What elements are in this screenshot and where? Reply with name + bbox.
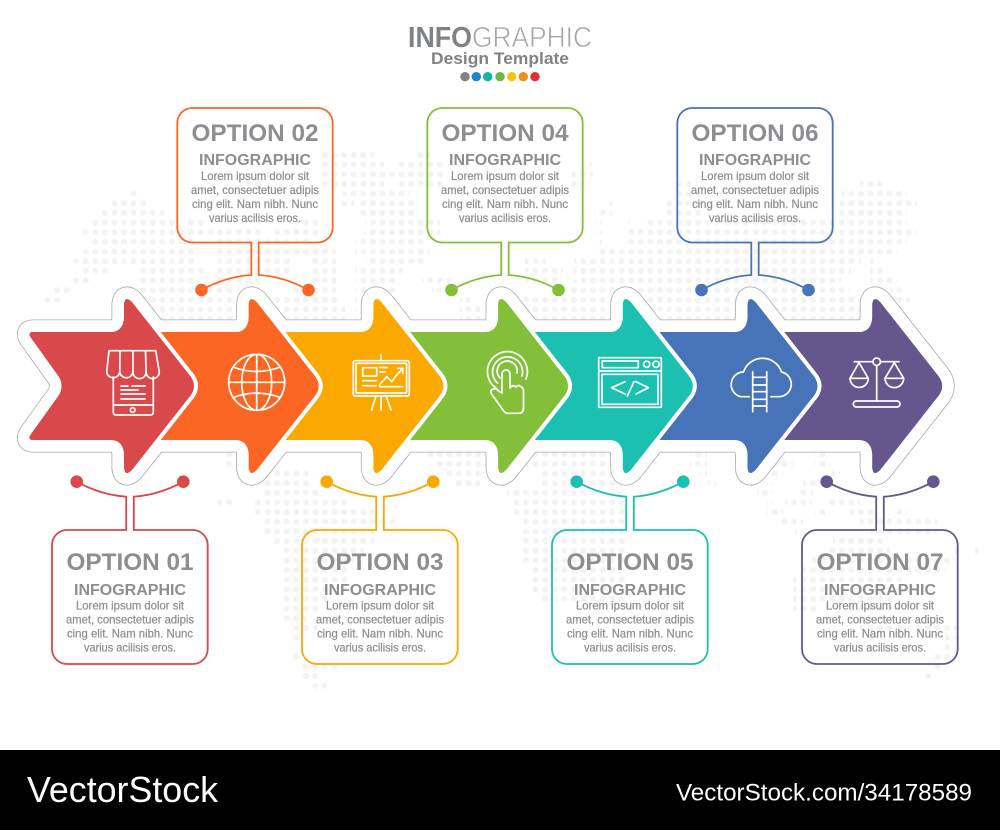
icon: cloud with ladder	[731, 358, 791, 412]
text: option 01: Lorem ipsum dolor sit	[76, 598, 185, 612]
connector dots: option 05	[570, 475, 690, 488]
icon: storefront tablet	[107, 351, 159, 415]
text: option 01: OPTION 01	[66, 549, 194, 576]
text: option 06: amet, consectetuer adipis	[691, 183, 819, 197]
panel: option 06	[677, 108, 833, 296]
arrow 5: teal	[524, 299, 693, 473]
footer bar	[0, 750, 1000, 830]
arrow 6: blue	[648, 299, 818, 473]
text: option 01: cing elit. Nam nibh. Nunc	[67, 626, 193, 640]
panel: option 04	[427, 108, 583, 296]
title: INFOGRAPHIC Design Template: Design Template	[431, 49, 569, 68]
title: INFOGRAPHIC Design Template: GRAPHIC	[472, 22, 592, 54]
text: option 05: amet, consectetuer adipis	[566, 612, 694, 626]
text: option 06: OPTION 06	[692, 120, 818, 147]
connector and box outline: option 05	[552, 482, 708, 664]
title colour dots	[460, 72, 540, 81]
connector and box outline: option 07	[802, 482, 958, 664]
arrow 2: orange	[150, 299, 319, 473]
arrow 7: purple	[773, 299, 942, 473]
text: option 05: Lorem ipsum dolor sit	[576, 598, 685, 612]
text: option 05: INFOGRAPHIC	[574, 582, 686, 599]
text: option 03: varius acilisis eros.	[334, 640, 426, 654]
text: option 07: INFOGRAPHIC	[824, 582, 936, 599]
panel: option 01	[52, 475, 208, 664]
panel: option 03	[302, 475, 458, 664]
text: option 02: amet, consectetuer adipis	[191, 183, 319, 197]
connector and box outline: option 06	[677, 108, 833, 290]
icon: balance scales	[850, 358, 904, 407]
title: INFOGRAPHIC Design Template	[408, 22, 592, 68]
arrow 1: red	[29, 299, 194, 473]
text: option 03: OPTION 03	[316, 549, 444, 576]
text: option 04: INFOGRAPHIC	[449, 152, 561, 169]
icon: touch hand	[487, 352, 527, 413]
text: option 06: Lorem ipsum dolor sit	[701, 169, 810, 183]
text: option 03: cing elit. Nam nibh. Nunc	[317, 626, 443, 640]
connector dots: option 04	[445, 284, 565, 296]
text: option 03: INFOGRAPHIC	[324, 582, 436, 599]
text: option 03	[316, 549, 444, 654]
arrow 4: green	[399, 299, 568, 473]
connector and box outline: option 03	[302, 482, 458, 664]
connector and box outline: option 02	[177, 108, 333, 290]
text: option 03: Lorem ipsum dolor sit	[326, 598, 435, 612]
icon: presentation board with chart	[353, 355, 409, 410]
text: option 05	[566, 549, 694, 654]
text: option 07: Lorem ipsum dolor sit	[826, 598, 935, 612]
connector dots: option 07	[820, 475, 940, 488]
title: INFOGRAPHIC Design Template: INFO	[408, 22, 472, 54]
text: option 04: amet, consectetuer adipis	[441, 183, 569, 197]
text: option 04: varius acilisis eros.	[459, 211, 551, 225]
footer brand: VectorStock	[27, 769, 219, 810]
connector dots: option 01	[70, 475, 190, 488]
icon: globe	[229, 354, 285, 410]
text: option 02: OPTION 02	[192, 120, 318, 147]
connector and box outline: option 01	[52, 482, 208, 664]
text: option 05: varius acilisis eros.	[584, 640, 676, 654]
text: option 04: cing elit. Nam nibh. Nunc	[442, 197, 568, 211]
arrow outline: grey contour around the chain	[29, 299, 942, 473]
text: option 01: amet, consectetuer adipis	[66, 612, 194, 626]
text: option 01	[66, 549, 194, 654]
text: option 04	[441, 120, 569, 225]
text: option 02: Lorem ipsum dolor sit	[201, 169, 310, 183]
text: option 07: amet, consectetuer adipis	[816, 612, 944, 626]
text: option 03: amet, consectetuer adipis	[316, 612, 444, 626]
text: option 06	[691, 120, 819, 225]
text: option 07	[816, 549, 944, 654]
connector dots: option 06	[695, 284, 815, 296]
text: option 06: varius acilisis eros.	[709, 211, 801, 225]
dotted world map background	[44, 150, 983, 691]
text: option 05: OPTION 05	[566, 549, 694, 576]
text: option 04: Lorem ipsum dolor sit	[451, 169, 560, 183]
text: option 02: varius acilisis eros.	[209, 211, 301, 225]
panel: option 05	[552, 475, 708, 664]
text: option 02: cing elit. Nam nibh. Nunc	[192, 197, 318, 211]
text: option 07: cing elit. Nam nibh. Nunc	[817, 626, 943, 640]
footer url: VectorStock.com/34178589	[676, 780, 972, 806]
panel: option 02	[177, 108, 333, 296]
arrow 3: amber	[274, 299, 443, 473]
text: option 02	[191, 120, 319, 225]
text: option 07: varius acilisis eros.	[834, 640, 926, 654]
text: option 06: INFOGRAPHIC	[699, 152, 811, 169]
text: option 05: cing elit. Nam nibh. Nunc	[567, 626, 693, 640]
text: option 01: varius acilisis eros.	[84, 640, 176, 654]
panel: option 07	[802, 475, 958, 664]
text: option 04: OPTION 04	[442, 120, 569, 147]
text: option 07: OPTION 07	[816, 549, 944, 576]
connector and box outline: option 04	[427, 108, 583, 290]
connector dots: option 02	[195, 284, 315, 296]
connector dots: option 03	[320, 475, 440, 488]
text: option 06: cing elit. Nam nibh. Nunc	[692, 197, 818, 211]
text: option 01: INFOGRAPHIC	[74, 582, 186, 599]
icon: code window	[599, 358, 661, 407]
text: option 02: INFOGRAPHIC	[199, 152, 311, 169]
